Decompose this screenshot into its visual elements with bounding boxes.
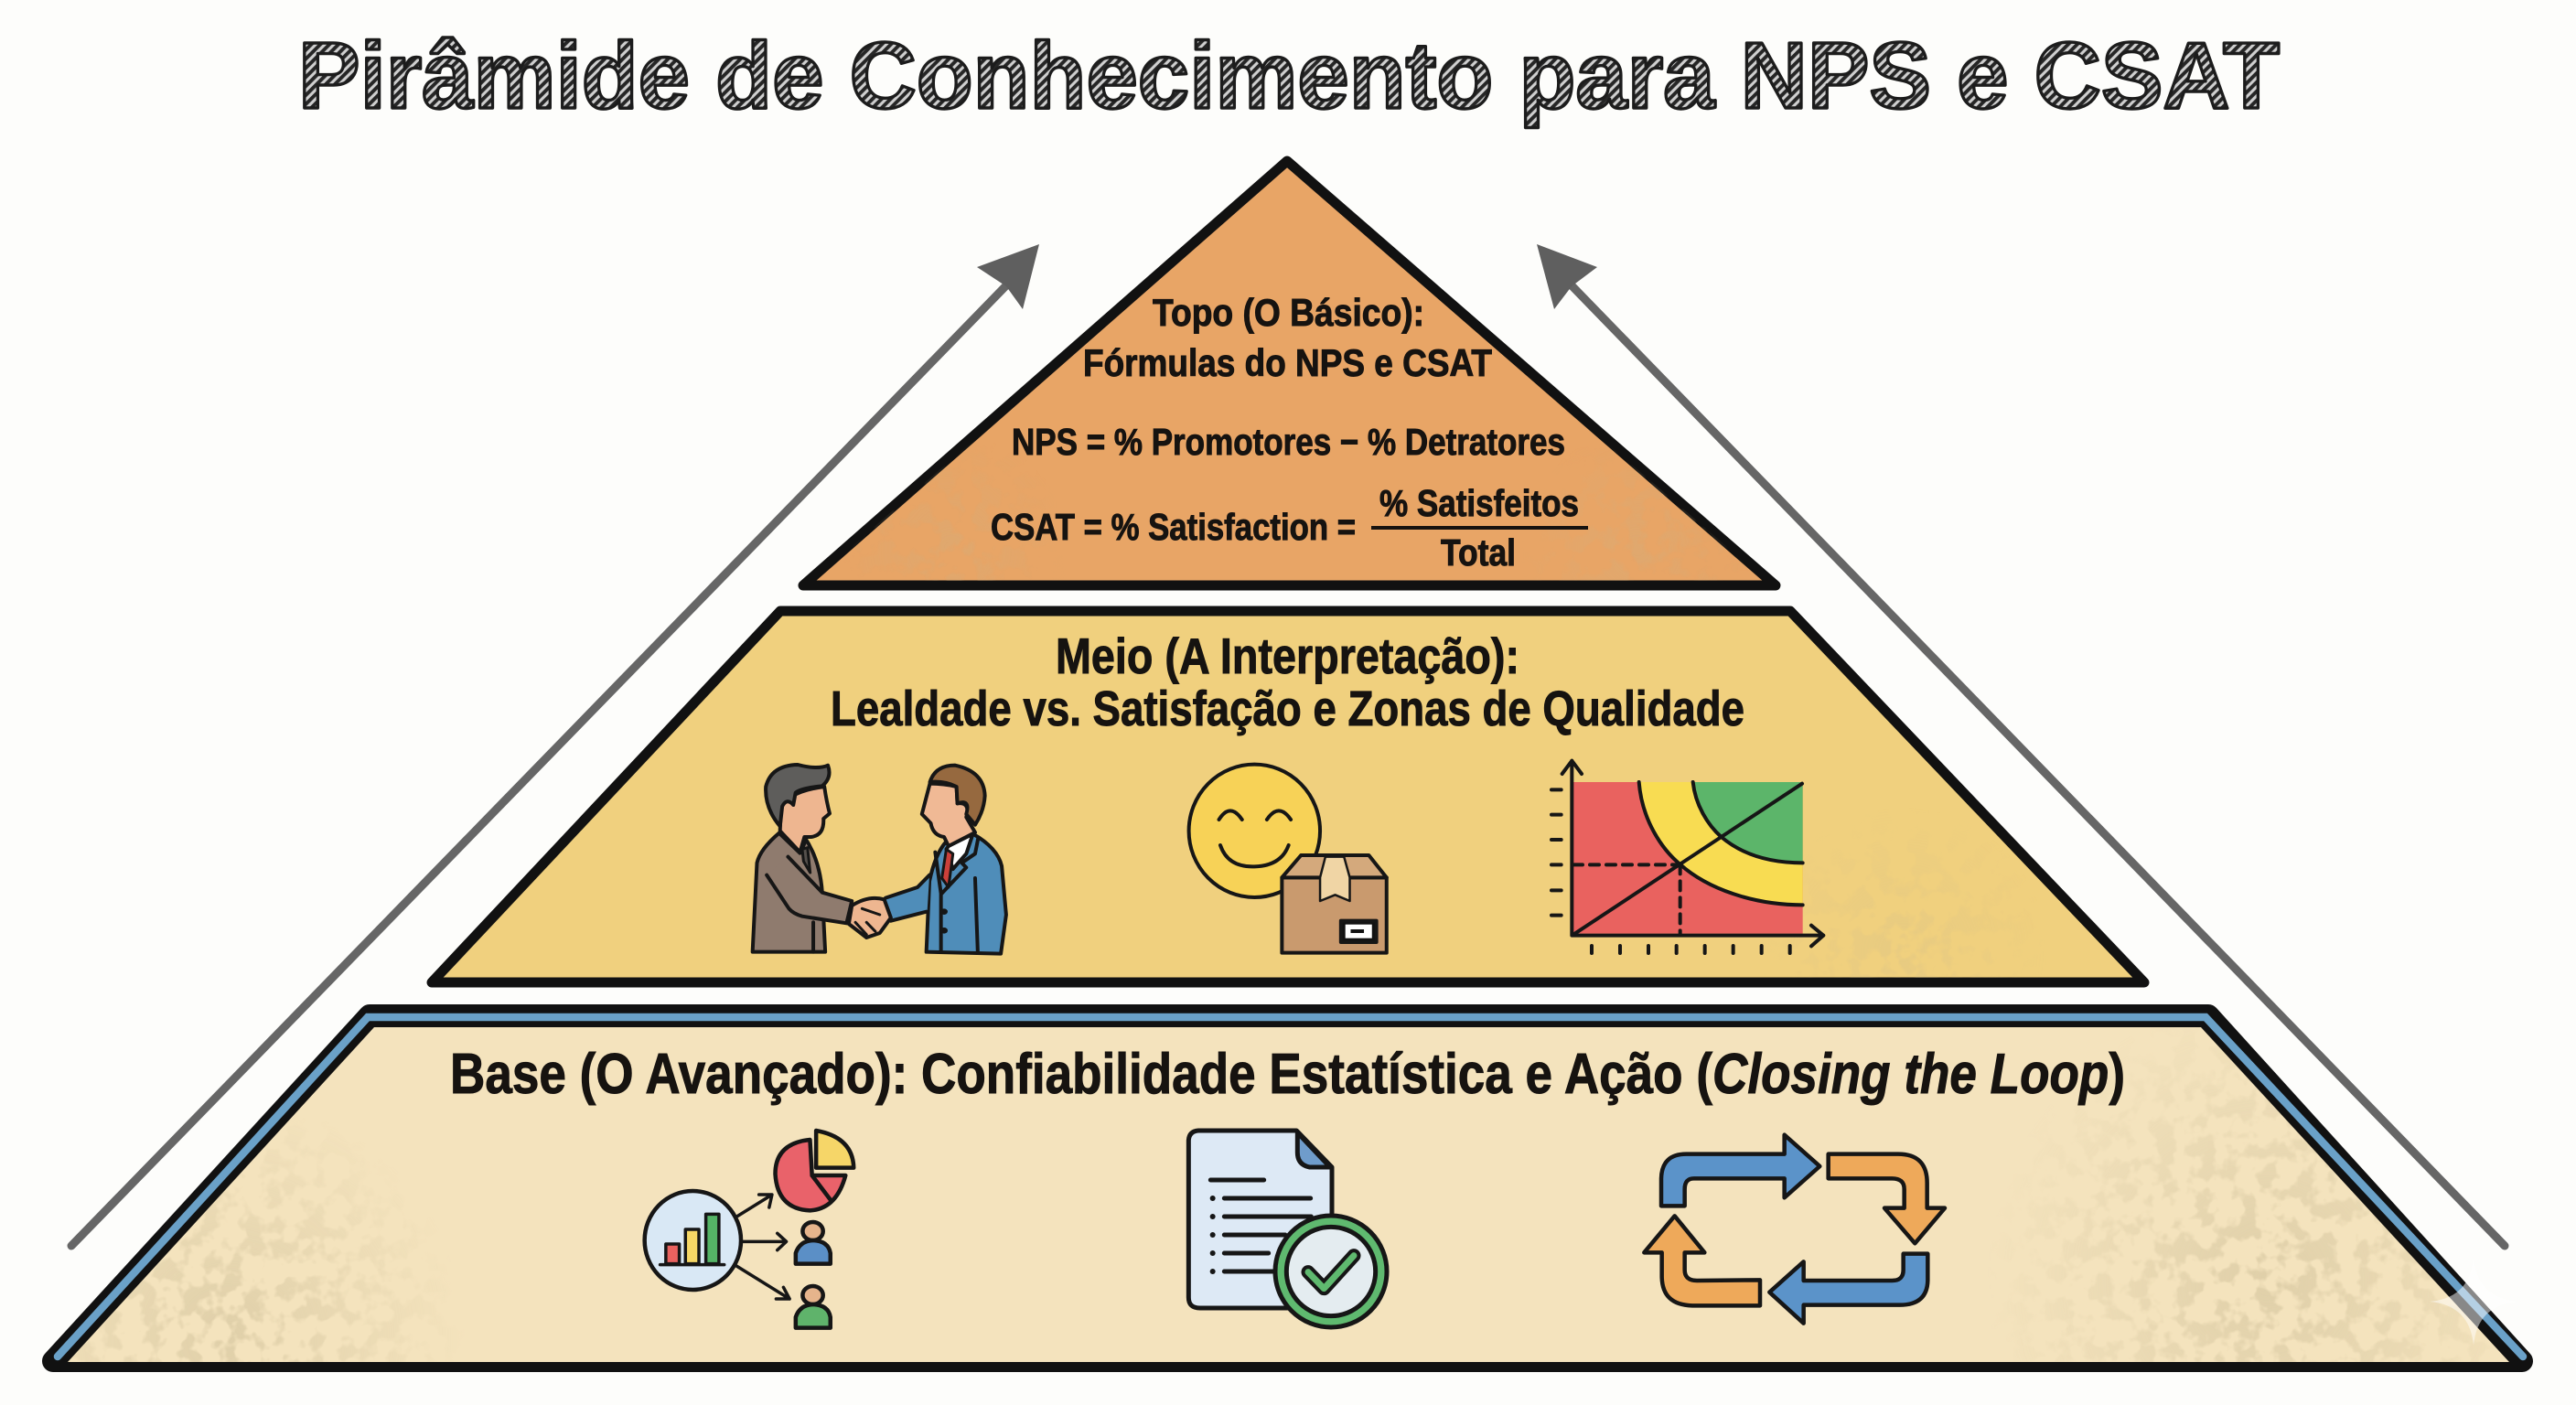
formula: NPS: NPS = % Promotores − % Detratores <box>1012 421 1565 463</box>
icon: segmented statistics <box>645 1131 853 1328</box>
arrow: left upward <box>71 244 1039 1246</box>
formula: CSAT: % Satisfeitos <box>1379 482 1579 524</box>
heading: middle tier <box>831 627 1744 736</box>
heading: middle tier: Meio (A Interpretação): <box>1056 627 1519 684</box>
heading: base tier: Base (O Avançado): Confiabilidade Estatística e Ação (Closing the Loop) <box>450 1043 2125 1106</box>
panel: pyramid top <box>796 161 1784 585</box>
icon: closing the loop cycle <box>1644 1135 1945 1324</box>
formula: CSAT <box>991 482 1588 574</box>
heading: top tier <box>1083 291 1492 384</box>
formula: CSAT: Total <box>1441 531 1516 574</box>
icon: quality zones chart <box>1551 761 1823 953</box>
heading: top tier: Topo (O Básico): <box>1153 291 1424 334</box>
heading: top tier: Fórmulas do NPS e CSAT <box>1083 341 1492 384</box>
panel: pyramid base <box>53 1015 2523 1365</box>
panel: pyramid middle <box>432 611 2144 983</box>
title: Pirâmide de Conhecimento para NPS e CSAT <box>298 23 2280 128</box>
arrow: right upward <box>1537 244 2505 1246</box>
heading: middle tier: Lealdade vs. Satisfação e Zonas de Qualidade <box>831 681 1744 736</box>
formula: CSAT: CSAT = % Satisfaction = <box>991 506 1356 548</box>
icon: document with check <box>1188 1131 1387 1327</box>
icon: handshake <box>753 765 1006 954</box>
icon: smiley and box <box>1189 765 1387 953</box>
sparkle mark <box>2430 1258 2517 1346</box>
